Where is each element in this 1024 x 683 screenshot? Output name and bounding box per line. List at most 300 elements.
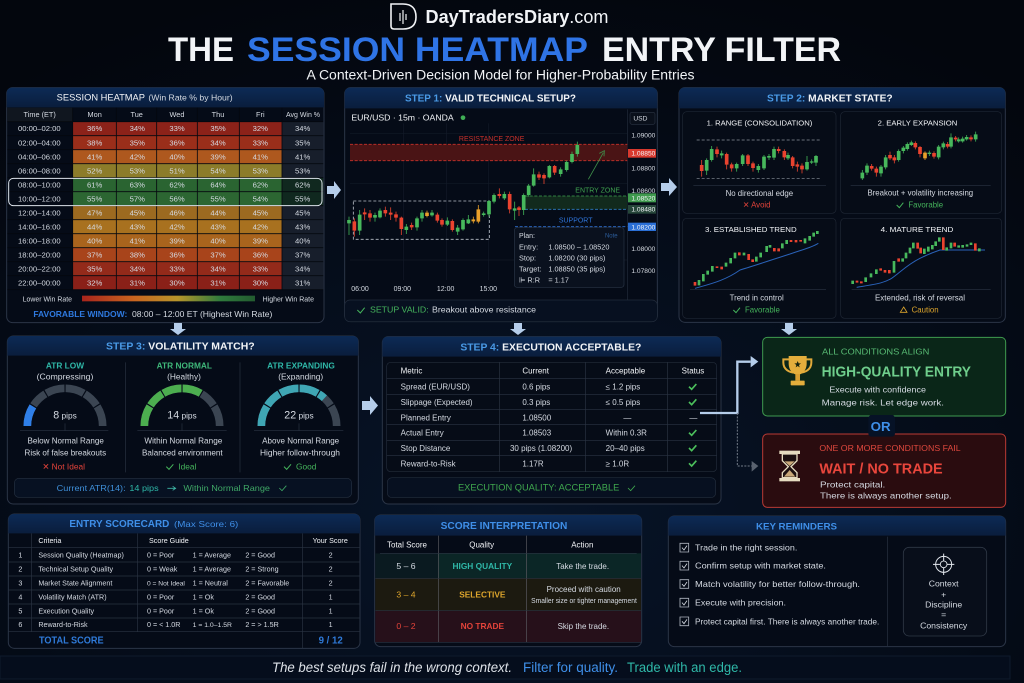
scorecard table: Criteria	[38, 537, 61, 545]
heatmap table: 47%	[87, 209, 103, 218]
reminders checklist: Execute with precision.	[695, 598, 786, 608]
card: wait no trade: Protect capital.	[820, 479, 885, 489]
heatmap table: 39%	[210, 152, 226, 161]
trade plan box: Target:	[519, 265, 541, 274]
heatmap table: 36%	[253, 251, 268, 260]
panel: outcomes	[700, 337, 1006, 507]
heatmap table: 35%	[130, 138, 145, 147]
arrow: heatmap to step 1	[327, 181, 341, 199]
gauge: ATR normal: Balanced environment	[142, 448, 223, 458]
heatmap heading: (Win Rate % by Hour)	[148, 93, 233, 103]
interpretation table: Skip the trade.	[558, 622, 609, 631]
scorecard table: 1 = Ok	[193, 607, 214, 615]
heatmap table: 56%	[169, 195, 185, 204]
gauge: ATR normal: ATR NORMAL	[157, 361, 212, 371]
context discipline consistency box: Consistency	[920, 621, 968, 631]
footer tagline: The best setups fail in the wrong context.	[272, 660, 512, 675]
panel: score interpretation	[375, 515, 642, 647]
heatmap table: 55%	[295, 195, 311, 204]
scorecard table: 1 = Average	[193, 565, 231, 573]
panel: step 4 execution acceptable	[382, 337, 721, 504]
resistance zone	[350, 136, 627, 161]
execution metrics table: Acceptable	[606, 366, 646, 375]
execution metrics table	[387, 362, 717, 472]
heatmap table: 22:00–00:00	[18, 279, 61, 288]
scorecard table: 1 = Ok	[193, 593, 214, 601]
gauge: ATR normal	[137, 361, 227, 471]
trade plan box: 1.08850 (35 pips)	[548, 265, 605, 274]
heatmap table: 32%	[87, 279, 103, 288]
heatmap table: 34%	[210, 265, 226, 274]
panel: step 1 valid technical setup	[345, 88, 657, 322]
step 1 heading: STEP 1: VALID TECHNICAL SETUP?	[405, 93, 576, 104]
footer tagline	[0, 656, 1010, 679]
price axis	[628, 132, 656, 275]
context discipline consistency box: Context	[929, 579, 959, 589]
interpretation table: 0 – 2	[396, 621, 416, 631]
execution metrics table: ≤ 0.5 pips	[606, 398, 640, 407]
scorecard table: 4	[18, 593, 22, 601]
heatmap table: 35%	[295, 138, 311, 147]
execution metrics table: Metric	[401, 366, 422, 375]
panel: session heatmap	[7, 88, 324, 323]
heatmap colour legend	[23, 296, 314, 303]
favorable window note: FAVORABLE WINDOW:	[33, 309, 127, 319]
scorecard table: 2	[329, 565, 333, 573]
support level: SUPPORT	[559, 218, 593, 225]
heatmap table: 39%	[253, 237, 268, 246]
scorecard table: Your Score	[313, 537, 348, 545]
price axis: 1.08480	[631, 207, 656, 214]
heatmap table: 45%	[295, 209, 311, 218]
price axis: 1.08850	[631, 151, 656, 158]
card: high-quality entry	[763, 337, 1006, 416]
gauge: ATR expanding: Higher follow-through	[260, 448, 340, 458]
gauge: ATR low: ✕ Not Ideal	[42, 461, 85, 471]
price axis: 1.08800	[631, 165, 656, 172]
heatmap colour legend: Lower Win Rate	[23, 296, 72, 303]
heatmap table: 10:00–12:00	[18, 195, 61, 204]
panel: step 2 market state	[679, 88, 1005, 322]
total score: TOTAL SCORE	[39, 635, 104, 646]
heatmap table: 31%	[210, 279, 226, 288]
interpretation table: Total Score	[387, 541, 428, 550]
title: ENTRY FILTER	[602, 31, 841, 69]
gauge: ATR normal: (Healthy)	[167, 372, 201, 382]
execution metrics table: —	[623, 413, 631, 422]
heatmap table: 06:00–08:00	[18, 166, 61, 175]
scorecard table: 1 = Average	[193, 551, 231, 559]
setup valid status bar: Breakout above resistance	[432, 305, 536, 315]
title: THE	[168, 31, 234, 69]
gauge: ATR expanding: Above Normal Range	[262, 435, 340, 445]
execution metrics table: Status	[682, 366, 704, 375]
arrow: execution to high-quality entry	[700, 356, 758, 413]
gauge: ATR expanding: ATR EXPANDING	[267, 361, 335, 371]
heatmap table	[7, 108, 323, 290]
heatmap table: 34%	[130, 265, 145, 274]
card: early expansion	[841, 112, 1002, 213]
scorecard table: 6	[18, 621, 22, 629]
gauge: ATR normal: Within Normal Range	[144, 435, 223, 445]
card: mature trend: Extended, risk of reversal	[875, 293, 965, 302]
heatmap table: 41%	[253, 152, 268, 161]
heatmap colour legend: Higher Win Rate	[263, 296, 314, 303]
interpretation table: Proceed with caution	[547, 585, 621, 594]
card: wait no trade: ONE OR MORE CONDITIONS FAIL	[819, 443, 961, 453]
candlestick chart	[349, 109, 656, 300]
card: early expansion: Favorable	[908, 201, 943, 210]
heatmap table: 43%	[210, 223, 226, 232]
arrow: step 1 to step 4	[510, 323, 526, 335]
gauge: ATR low: (Compressing)	[37, 372, 94, 382]
current ATR bar: Current ATR(14):	[57, 483, 126, 493]
heatmap table: 44%	[210, 209, 226, 218]
trade plan box: 1.08200 (30 pips)	[548, 254, 605, 263]
heatmap table: 43%	[130, 223, 145, 232]
heatmap table: 41%	[130, 237, 145, 246]
scorecard table: 2 = Good	[245, 551, 275, 559]
heatmap table: 02:00–04:00	[18, 138, 61, 147]
interpretation table: NO TRADE	[461, 621, 505, 631]
heatmap table: 64%	[210, 181, 226, 190]
gauge: ATR low: Risk of false breakouts	[24, 448, 106, 458]
entry zone: ENTRY ZONE	[575, 187, 620, 194]
gauge: ATR low: ATR LOW	[46, 361, 84, 371]
card: range: No directional edge	[726, 189, 793, 198]
heatmap table: 18:00–20:00	[18, 251, 61, 260]
scorecard table: 0 = Weak	[147, 565, 178, 573]
reminders checklist: Confirm setup with market state.	[695, 561, 826, 571]
heatmap table: 62%	[295, 181, 311, 190]
key reminders heading: KEY REMINDERS	[756, 522, 837, 532]
interpretation table: SELECTIVE	[459, 589, 506, 599]
scorecard table: 0 = Poor	[147, 607, 175, 615]
heatmap table: 63%	[130, 181, 145, 190]
setup valid status bar	[345, 300, 657, 322]
card: wait no trade: There is always another setup.	[820, 491, 952, 501]
heatmap table: 40%	[87, 237, 103, 246]
interpretation table: Take the trade.	[556, 562, 609, 571]
footer tagline: Filter for quality.	[523, 660, 618, 675]
execution metrics table: Actual Entry	[401, 429, 444, 438]
heatmap table: 51%	[169, 166, 185, 175]
card: range	[683, 112, 836, 213]
icon: trophy	[783, 356, 811, 385]
heatmap table: 30%	[169, 279, 185, 288]
context discipline consistency box: =	[941, 610, 946, 620]
heatmap table: 45%	[130, 209, 145, 218]
reminders checklist: Match volatility for better follow-through.	[695, 579, 860, 589]
price axis: 1.07800	[631, 268, 656, 275]
interpretation table: Action	[571, 541, 593, 550]
execution metrics table: Stop Distance	[401, 444, 451, 453]
step 4 heading: STEP 4: EXECUTION ACCEPTABLE?	[460, 343, 641, 354]
trade plan box: ⊫ R:R	[519, 276, 540, 285]
total score	[39, 635, 343, 646]
OR divider: OR	[871, 419, 891, 434]
scorecard table: 1	[329, 621, 333, 629]
card: range: ✕ Avoid	[743, 201, 771, 210]
interpretation table: Smaller size or tighter management	[531, 598, 637, 605]
step 2 heading: STEP 2: MARKET STATE?	[767, 93, 893, 104]
execution metrics table: 1.17R	[522, 459, 544, 468]
panel: step 3 volatility match	[7, 336, 358, 504]
context discipline consistency box: Discipline	[925, 600, 962, 610]
card: wait no trade	[763, 434, 1006, 507]
current ATR bar	[14, 478, 352, 497]
heatmap table: 32%	[253, 124, 268, 133]
current ATR bar: Within Normal Range	[183, 483, 270, 493]
heatmap table: Fri	[256, 110, 265, 119]
icon: hourglass	[779, 451, 800, 481]
gauge: ATR expanding	[254, 361, 343, 471]
arrow: projected move	[588, 151, 604, 179]
heatmap table: 37%	[295, 251, 311, 260]
scorecard table: 2 = Favorable	[245, 579, 289, 587]
scorecard table: Volatility Match (ATR)	[38, 593, 107, 601]
heatmap table: 30%	[253, 279, 268, 288]
heatmap table: 54%	[253, 195, 268, 204]
heatmap table: 34%	[295, 124, 311, 133]
setup valid status bar: SETUP VALID:	[370, 305, 429, 315]
gauge: ATR expanding: Good	[296, 461, 317, 471]
price axis: 1.08000	[631, 246, 656, 253]
heatmap table: 36%	[169, 138, 185, 147]
title	[168, 31, 841, 69]
heatmap heading: SESSION HEATMAP	[57, 93, 145, 103]
scorecard table: 3	[18, 579, 22, 587]
highlighted favorable rows	[9, 178, 322, 206]
execution quality bar: EXECUTION QUALITY: ACCEPTABLE	[458, 483, 619, 493]
footer tagline: Trade with an edge.	[627, 660, 742, 675]
heatmap table: 44%	[87, 223, 103, 232]
trade plan box: = 1.17	[548, 276, 569, 285]
heatmap table: 31%	[130, 279, 145, 288]
gauge: ATR normal: 14 pips	[167, 410, 197, 422]
heatmap table: 00:00–02:00	[18, 124, 61, 133]
panel: entry scorecard	[8, 514, 360, 648]
scorecard table: 5	[18, 607, 22, 615]
heatmap table: 16:00–18:00	[18, 237, 61, 246]
favorable window note: 08:00 – 12:00 ET (Highest Win Rate)	[132, 309, 273, 319]
interpretation table	[375, 536, 641, 642]
heatmap table: 54%	[210, 166, 226, 175]
card: early expansion: Breakout + volatility increasing	[867, 189, 973, 198]
heatmap table: 55%	[210, 195, 226, 204]
subtitle: A Context-Driven Decision Model for Higher-Probability Entries	[306, 68, 695, 82]
price axis: 1.08200	[631, 224, 656, 231]
heatmap table: 41%	[87, 152, 103, 161]
heatmap table: 33%	[253, 138, 268, 147]
heatmap table: 40%	[169, 152, 185, 161]
scorecard table: 0 = Not Ideal	[147, 580, 185, 587]
execution metrics table: 0.3 pips	[522, 398, 550, 407]
heatmap table: 55%	[87, 195, 103, 204]
execution metrics table: Within 0.3R	[606, 429, 647, 438]
execution metrics table: Planned Entry	[401, 413, 451, 422]
heatmap table: Thu	[212, 110, 224, 119]
current ATR bar: 14 pips	[129, 483, 159, 493]
price axis: 1.09000	[631, 132, 656, 139]
heatmap table: 33%	[169, 124, 185, 133]
scorecard table: 1 = Neutral	[193, 579, 228, 587]
heatmap heading	[57, 93, 233, 103]
execution metrics table: 20–40 pips	[606, 444, 645, 453]
card: high-quality entry: ALL CONDITIONS ALIGN	[822, 347, 929, 357]
total score: 9 / 12	[319, 635, 343, 646]
execution metrics table: 1.08503	[522, 429, 552, 438]
gauge: ATR low: 8 pips	[53, 410, 77, 422]
heatmap table: 35%	[210, 124, 226, 133]
heatmap table: Tue	[130, 110, 143, 119]
scorecard table: 2 = Good	[245, 593, 275, 601]
heatmap table: 08:00–10:00	[18, 181, 61, 190]
time axis: 12:00	[437, 286, 455, 293]
time axis: 09:00	[394, 286, 411, 293]
scorecard table: 2	[18, 565, 22, 573]
favorable window note	[33, 309, 273, 319]
scorecard heading: ENTRY SCORECARD	[69, 519, 169, 530]
scorecard table: 1	[18, 551, 22, 559]
trade plan box: Plan:	[519, 233, 535, 240]
heatmap table: 45%	[253, 209, 268, 218]
heatmap table: 37%	[87, 251, 103, 260]
heatmap table: 36%	[87, 124, 103, 133]
panel: key reminders	[668, 516, 1006, 647]
heatmap table: 43%	[295, 223, 311, 232]
heatmap table: 57%	[130, 195, 145, 204]
execution metrics table: ≥ 1.0R	[606, 459, 629, 468]
arrow: step 2 to outcome	[781, 323, 797, 335]
entry zone	[525, 187, 627, 209]
scorecard table: 2 = Strong	[245, 565, 279, 573]
title: SESSION HEATMAP	[247, 31, 588, 69]
heatmap table: 34%	[295, 265, 311, 274]
execution metrics table: Reward-to-Risk	[401, 459, 456, 468]
heatmap table: 31%	[295, 279, 311, 288]
scorecard table: 1	[329, 607, 333, 615]
heatmap table: 42%	[130, 152, 145, 161]
heatmap table: 46%	[169, 209, 185, 218]
scorecard table: 2 = > 1.5R	[245, 621, 279, 629]
heatmap table: 53%	[295, 166, 311, 175]
heatmap table: 33%	[253, 265, 268, 274]
heatmap table: 40%	[295, 237, 311, 246]
heatmap table: Avg Win %	[286, 112, 320, 119]
scorecard table: 2	[329, 551, 333, 559]
heatmap table: 34%	[130, 124, 145, 133]
arrow: heatmap to step 3	[170, 323, 186, 335]
OR divider	[868, 415, 895, 437]
card: high-quality entry: Execute with confidence	[829, 384, 926, 394]
scorecard table: 0 = Poor	[147, 551, 175, 559]
card: range: 1. RANGE (CONSOLIDATION)	[707, 119, 813, 128]
heatmap table: 12:00–14:00	[18, 209, 61, 218]
time axis: 06:00	[351, 286, 369, 293]
reminders checklist	[680, 543, 879, 626]
context discipline consistency box: +	[941, 589, 946, 599]
heatmap table: 62%	[253, 181, 268, 190]
heatmap table: Time (ET)	[24, 110, 56, 119]
resistance zone: RESISTANCE ZONE	[459, 136, 525, 143]
header: logo and brand: DayTradersDiary.com	[426, 6, 608, 27]
card: established trend: Trend in control	[730, 293, 784, 302]
heatmap table: 14:00–16:00	[18, 223, 61, 232]
gauge: ATR low	[20, 361, 108, 471]
heatmap table: 40%	[210, 237, 226, 246]
heatmap table: 53%	[253, 166, 268, 175]
scorecard table: Execution Quality	[38, 607, 94, 615]
interpretation table: Quality	[469, 541, 494, 550]
trade plan box	[514, 228, 624, 287]
gauge: ATR low: Below Normal Range	[27, 435, 104, 445]
heatmap table: 34%	[210, 138, 226, 147]
heatmap table: 61%	[87, 181, 103, 190]
execution metrics table: ≤ 1.2 pips	[606, 383, 640, 392]
trade plan box: Note	[605, 233, 618, 239]
card: high-quality entry: Manage risk. Let edge work.	[822, 397, 944, 407]
scorecard table: Reward-to-Risk	[38, 621, 88, 629]
scorecard heading	[69, 519, 238, 530]
card: mature trend: Caution	[912, 306, 939, 315]
heatmap table: 42%	[253, 223, 268, 232]
card: mature trend	[841, 218, 1002, 318]
reminders checklist: Protect capital first. There is always another trade.	[695, 616, 879, 626]
heatmap table: 42%	[169, 223, 185, 232]
support level	[515, 218, 627, 227]
candlestick chart: EUR/USD · 15m · OANDA	[351, 113, 454, 123]
heatmap table: 35%	[87, 265, 103, 274]
context discipline consistency box	[903, 547, 987, 636]
scorecard table: 0 = < 1.0R	[147, 621, 180, 629]
heatmap table: 37%	[210, 251, 226, 260]
execution metrics table: Current	[522, 366, 550, 375]
card: established trend: 3. ESTABLISHED TREND	[705, 225, 797, 234]
execution metrics table: Slippage (Expected)	[401, 398, 473, 407]
execution metrics table: 0.6 pips	[522, 383, 550, 392]
card: mature trend: 4. MATURE TREND	[881, 225, 954, 234]
candlestick chart: USD	[633, 116, 648, 123]
gauge: ATR expanding: 22 pips	[284, 410, 314, 422]
interpretation table: HIGH QUALITY	[452, 561, 513, 571]
execution metrics table: —	[689, 413, 697, 422]
heatmap table: 38%	[130, 251, 145, 260]
score interpretation heading: SCORE INTERPRETATION	[441, 521, 567, 532]
heatmap table: 53%	[130, 166, 145, 175]
scorecard table: Session Quality (Heatmap)	[38, 551, 124, 559]
scorecard table: 0 = Poor	[147, 593, 175, 601]
card: established trend: Favorable	[745, 306, 780, 315]
heatmap table: 41%	[295, 152, 311, 161]
heatmap table: 38%	[87, 138, 103, 147]
price axis: 1.08600	[631, 188, 656, 195]
interpretation table: 3 – 4	[396, 589, 416, 599]
heatmap table: 33%	[169, 265, 185, 274]
trade plan box: Entry:	[519, 242, 538, 251]
scorecard table: 1	[329, 593, 333, 601]
scorecard table: Score Guide	[149, 537, 189, 545]
card: high-quality entry: HIGH-QUALITY ENTRY	[822, 364, 971, 380]
scorecard table	[8, 533, 360, 648]
execution metrics table: 1.08500	[522, 413, 552, 422]
heatmap table: Mon	[88, 110, 102, 119]
reminders checklist: Trade in the right session.	[695, 543, 797, 553]
arrow: execution to no trade	[737, 413, 758, 472]
gauge: ATR normal: Ideal	[178, 461, 197, 471]
scorecard table: Market State Alignment	[38, 579, 112, 587]
heatmap table: 39%	[169, 237, 185, 246]
